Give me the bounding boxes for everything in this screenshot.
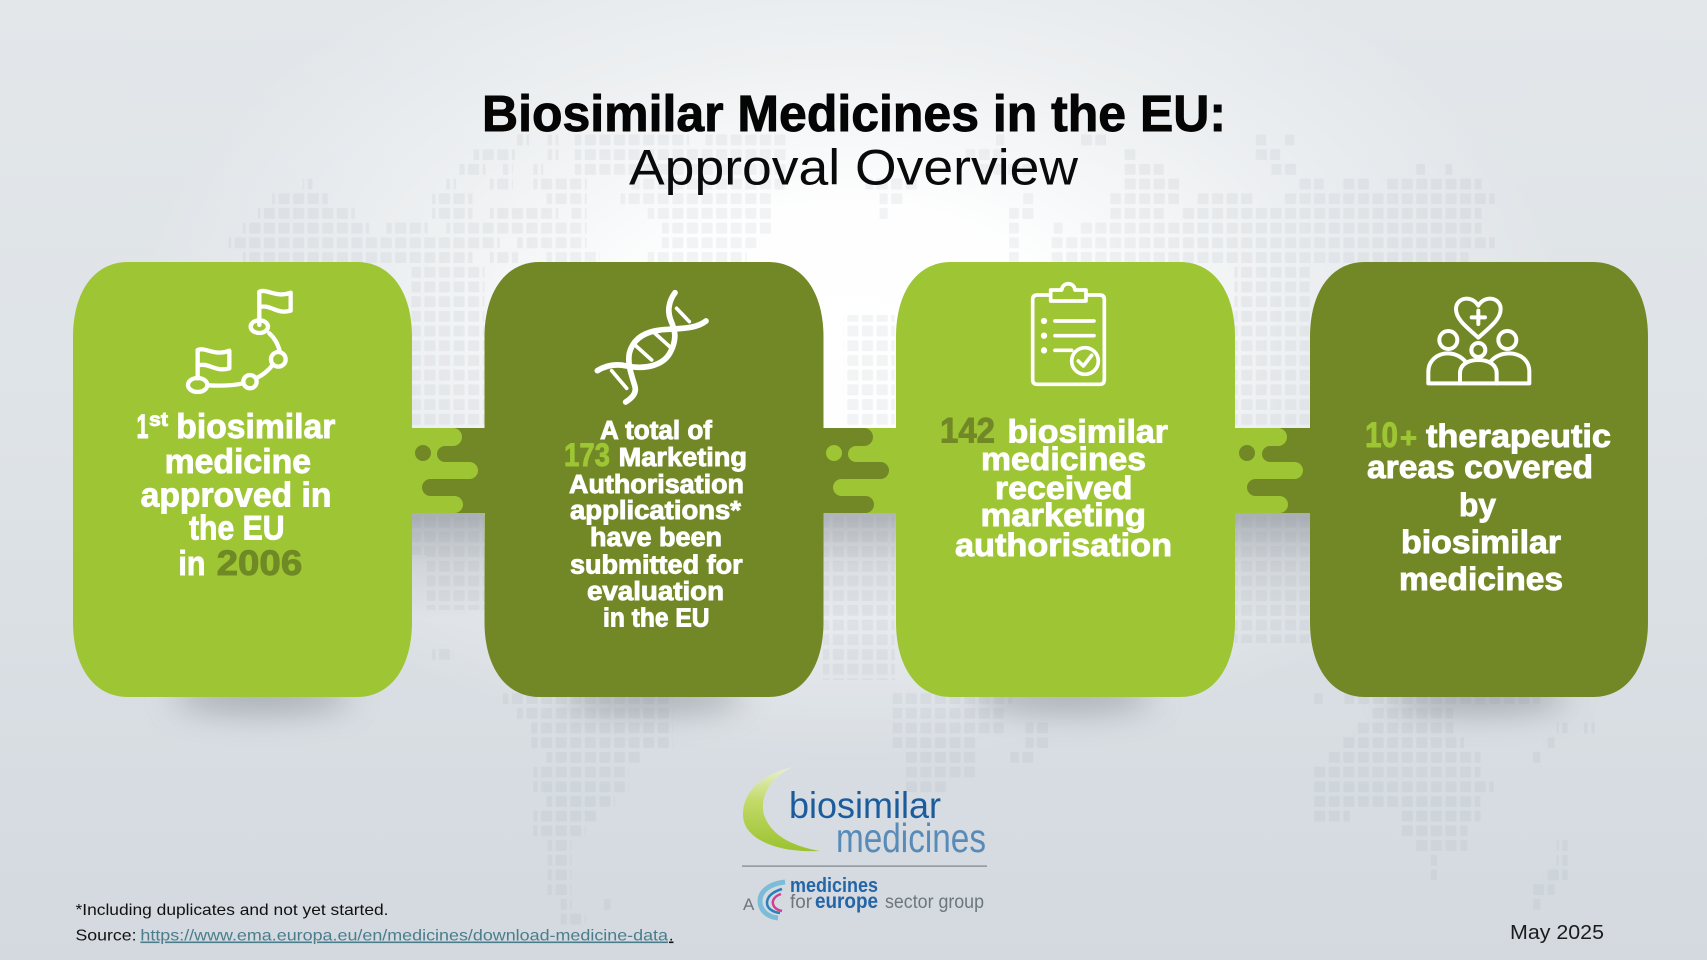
text: card 4 <box>1365 416 1611 597</box>
icon: route with flags <box>188 291 291 392</box>
text: card 2: 173 <box>564 437 610 473</box>
connector shadows <box>412 513 1310 618</box>
text: card 3: received <box>995 470 1132 506</box>
text: card 4: biosimilar <box>1401 524 1561 560</box>
text: card 1: 2006 <box>217 544 302 583</box>
text: card 4: medicines <box>1399 561 1563 597</box>
text: card 1: medicine <box>165 443 311 481</box>
logo: biosimilar medicines: medicines <box>836 815 986 861</box>
text: card 1: approved in <box>141 476 331 514</box>
logo: biosimilar medicines: europe <box>815 890 878 913</box>
text: card 3 <box>940 412 1172 563</box>
text: card 3: marketing <box>980 497 1146 533</box>
dotted world map <box>229 133 1595 926</box>
text: card 2: evaluation <box>587 578 724 606</box>
text: card 3: 142 <box>940 412 995 451</box>
logo: biosimilar medicines: for <box>790 892 813 913</box>
text: card 1 <box>136 408 335 583</box>
text: card 1: biosimilar <box>176 408 335 446</box>
text: card 4: + <box>1400 422 1417 453</box>
text: card 4: therapeutic <box>1426 418 1611 454</box>
text: card 3: authorisation <box>955 527 1172 563</box>
logo: biosimilar medicines: sector group <box>885 892 984 913</box>
footnote and source: https://www.ema.europa.eu/en/medicines/download-medicine-data <box>140 928 668 944</box>
date: May 2025 <box>1510 922 1604 944</box>
icon: people with heart <box>1428 299 1529 383</box>
text: card 1: st <box>149 410 169 431</box>
text: card 2: submitted for <box>570 552 743 580</box>
text: card 2: in the EU <box>603 605 710 633</box>
text: card 2: A total of <box>600 417 713 445</box>
text: card 1: 1 <box>136 408 148 446</box>
connector: card 2 to card 3 <box>821 428 897 513</box>
text: card 4: 10 <box>1365 416 1398 455</box>
panel: card 1 background <box>73 262 412 697</box>
panel: card 4 background <box>1310 262 1648 697</box>
logo: biosimilar medicines <box>742 767 987 918</box>
card shadows <box>172 680 1569 712</box>
panel: card 3 background <box>896 262 1235 697</box>
footnote and source: *Including duplicates and not yet started. <box>76 902 388 919</box>
footnote and source: . <box>669 928 673 944</box>
title: Biosimilar Medicines in the EU: <box>482 85 1226 142</box>
text: card 2 <box>564 417 747 633</box>
text: card 1: the EU <box>189 510 284 548</box>
title <box>482 85 1226 196</box>
text: card 2: applications* <box>570 497 741 525</box>
connector: card 1 to card 2 <box>410 428 486 513</box>
text: card 2: Authorisation <box>569 471 744 499</box>
title: Approval Overview <box>629 140 1079 196</box>
text: card 3: medicines <box>981 441 1146 477</box>
logo: biosimilar medicines: medicines <box>790 875 878 897</box>
logo: biosimilar medicines: biosimilar <box>789 785 941 826</box>
text: card 2: have been <box>590 524 722 552</box>
panel: card 2 background <box>484 262 824 697</box>
footnote and source <box>76 902 673 944</box>
connector: card 3 to card 4 <box>1233 428 1311 513</box>
icon: DNA helix <box>597 293 706 402</box>
text: card 4: by <box>1459 487 1496 523</box>
text: card 2: Marketing <box>619 444 747 472</box>
logo: biosimilar medicines: A <box>743 895 755 914</box>
text: card 4: areas covered <box>1367 449 1593 485</box>
text: card 1: in <box>178 545 205 583</box>
icon: clipboard with check <box>1033 284 1104 384</box>
footnote and source: Source: <box>76 928 136 944</box>
text: card 3: biosimilar <box>1008 414 1168 450</box>
